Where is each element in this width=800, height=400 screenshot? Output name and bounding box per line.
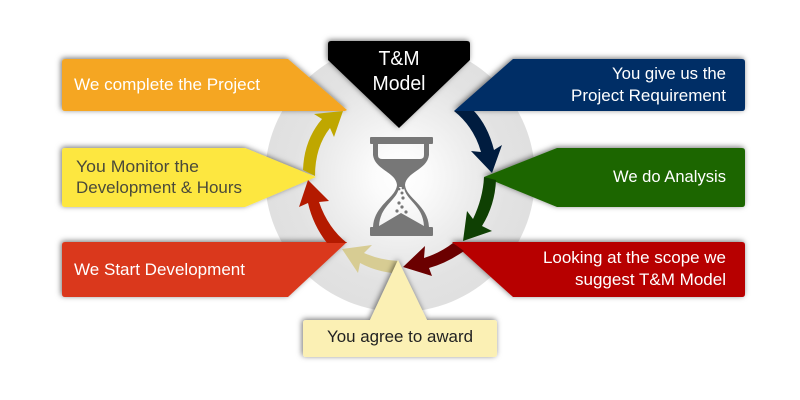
panel: you give us the project requirement [454, 59, 745, 111]
label: you give us the project requirement: Project Requirement [571, 86, 726, 105]
arrow: scope to award [403, 243, 464, 276]
arrow: analysis to scope [463, 177, 496, 241]
panel: T&M model heading [328, 41, 470, 128]
arrow: award to development [342, 245, 398, 273]
panel: we start development [62, 242, 347, 297]
panel: we do analysis [484, 148, 745, 207]
label: you give us the project requirement: You give us the [612, 64, 726, 83]
label: you agree to award: You agree to award [327, 327, 473, 346]
title: T&M Model: T&M [378, 48, 420, 70]
label: we start development: We Start Development [74, 260, 245, 279]
panel: we complete the project [62, 59, 347, 111]
label: you monitor the development: You Monitor the [76, 157, 199, 176]
label: scope suggestion: suggest T&M Model [575, 270, 726, 289]
background disc [265, 42, 535, 312]
label: we complete the project: We complete the Project [74, 75, 260, 94]
title: T&M Model: Model [372, 73, 426, 95]
label: scope suggestion: Looking at the scope we [543, 248, 726, 267]
arrow: requirement to analysis [454, 111, 502, 173]
panel: scope suggestion [452, 242, 745, 297]
label: you monitor the development: Development & Hours [76, 178, 242, 197]
panel: you agree to award [303, 260, 497, 357]
panel: you monitor the development [62, 148, 316, 207]
arrow: development to monitor [299, 180, 347, 243]
label: we do analysis: We do Analysis [613, 167, 726, 186]
arrow: monitor to complete [303, 111, 343, 176]
icon: hourglass [370, 137, 433, 236]
